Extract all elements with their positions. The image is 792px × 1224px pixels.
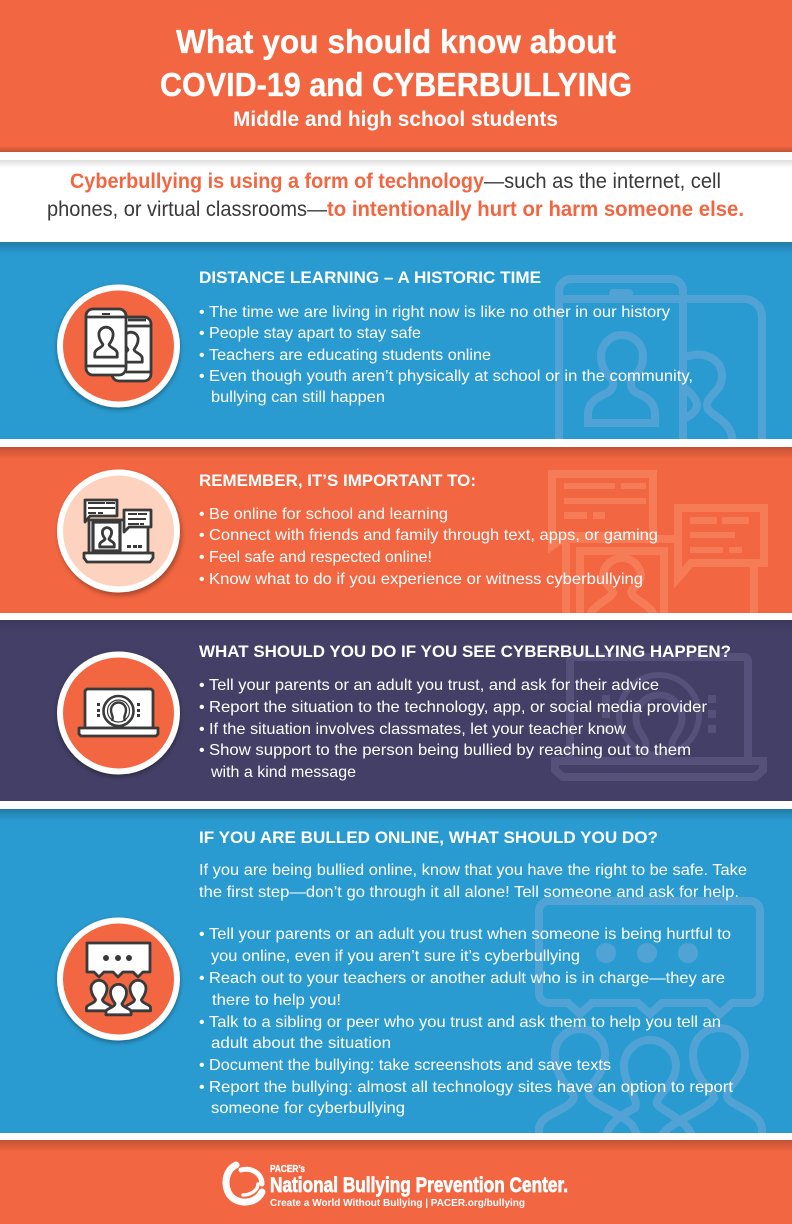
definition line 2: phones, or virtual classrooms— <box>47 198 327 221</box>
bullet list: The time we are living in right now is like no other in our history <box>209 304 670 321</box>
watermark: laptop and chat bubbles <box>552 474 764 620</box>
footer <box>0 1140 792 1224</box>
intro paragraph <box>199 862 747 901</box>
bullet list: you online, even if you aren’t sure it’s cyberbullying <box>211 948 580 965</box>
subtitle: Middle and high school students <box>233 108 558 131</box>
logo: organisation name <box>270 1164 568 1209</box>
bullet list: Document the bullying: take screenshots and save texts <box>209 1057 611 1074</box>
logo: organisation name: PACER’s <box>270 1164 305 1175</box>
bullet list: • <box>199 325 205 342</box>
bullet list: • <box>199 368 205 385</box>
definition line 1: —such as the internet, cell <box>484 170 721 193</box>
bullet list: • <box>199 1057 205 1074</box>
intro paragraph: the first step—don’t go through it all alone! Tell someone and ask for help. <box>199 884 739 901</box>
bullet list <box>199 677 708 781</box>
title: What you should know about <box>176 23 616 60</box>
icon: laptop with person <box>57 652 180 776</box>
bullet list: • <box>199 721 205 738</box>
bullet list <box>199 506 658 588</box>
definition line 2: to intentionally hurt or harm someone else. <box>327 198 744 221</box>
bullet list: • <box>199 970 205 987</box>
bullet list: Feel safe and respected online! <box>209 549 432 566</box>
bullet list: • <box>199 506 205 523</box>
bullet list: • <box>199 304 205 321</box>
bullet list: there to help you! <box>212 992 341 1009</box>
panel: if you see cyberbullying <box>0 620 792 801</box>
bullet list: Know what to do if you experience or witness cyberbullying <box>209 571 643 588</box>
intro paragraph: If you are being bullied online, know that you have the right to be safe. Take <box>199 862 747 879</box>
bullet list: someone for cyberbullying <box>211 1100 405 1117</box>
bullet list: • <box>199 926 205 943</box>
panel: if you are bullied online <box>0 809 792 1140</box>
bullet list: Report the bullying: almost all technology sites have an option to report <box>209 1079 734 1096</box>
bullet list: Reach out to your teachers or another adult who is in charge—they are <box>209 970 725 987</box>
definition band <box>0 160 792 221</box>
bullet list: Show support to the person being bullied by reaching out to them <box>209 742 691 759</box>
bullet list: • <box>199 1014 205 1031</box>
bullet list: Report the situation to the technology, app, or social media provider <box>209 699 708 716</box>
bullet list <box>199 304 693 406</box>
heading: DISTANCE LEARNING – A HISTORIC TIME <box>199 269 541 287</box>
bullet list: • <box>199 699 205 716</box>
bullet list: • <box>199 347 205 364</box>
title <box>160 23 632 103</box>
watermark: phones <box>559 279 762 445</box>
bullet list: • <box>199 549 205 566</box>
bullet list <box>199 926 734 1117</box>
bullet list: bullying can still happen <box>211 389 385 406</box>
logo: swirl <box>226 1165 262 1202</box>
watermark: group with speech bubble <box>539 901 762 1140</box>
bullet list: Be online for school and learning <box>209 506 448 523</box>
bullet list: • <box>199 527 205 544</box>
heading: WHAT SHOULD YOU DO IF YOU SEE CYBERBULLYING HAPPEN? <box>199 643 731 661</box>
bullet list: People stay apart to stay safe <box>209 325 421 342</box>
icon: group with speech bubble <box>57 918 180 1042</box>
bullet list: with a kind message <box>210 764 356 781</box>
watermark: laptop <box>555 657 763 777</box>
header banner <box>0 0 792 152</box>
bullet list: • <box>199 677 205 694</box>
heading: REMEMBER, IT’S IMPORTANT TO: <box>199 472 476 490</box>
bullet list: Even though youth aren’t physically at school or in the community, <box>209 368 693 385</box>
icon: phones <box>57 284 180 410</box>
bullet list: Talk to a sibling or peer who you trust and ask them to help you tell an <box>209 1014 721 1031</box>
logo: organisation name: Create a World Without Bullying | PACER.org/bullying <box>270 1197 525 1209</box>
title: COVID-19 and CYBERBULLYING <box>160 66 632 103</box>
heading: IF YOU ARE BULLED ONLINE, WHAT SHOULD YOU DO? <box>199 829 658 847</box>
bullet list: Connect with friends and family through text, apps, or gaming <box>209 527 658 544</box>
panel: remember <box>0 447 792 620</box>
definition line 1: Cyberbullying is using a form of technology <box>70 170 484 193</box>
bullet list: Tell your parents or an adult you trust when someone is being hurtful to <box>209 926 731 943</box>
panel: distance learning <box>0 242 792 445</box>
logo: organisation name: National Bullying Prevention Center. <box>270 1174 568 1197</box>
bullet list: Tell your parents or an adult you trust, and ask for their advice <box>209 677 659 694</box>
icon: laptop and chat <box>57 470 182 596</box>
bullet list: If the situation involves classmates, let your teacher know <box>209 721 626 738</box>
bullet list: adult about the situation <box>211 1035 391 1052</box>
bullet list: Teachers are educating students online <box>209 347 491 364</box>
bullet list: • <box>199 1079 205 1096</box>
bullet list: • <box>199 742 205 759</box>
bullet list: • <box>199 571 205 588</box>
